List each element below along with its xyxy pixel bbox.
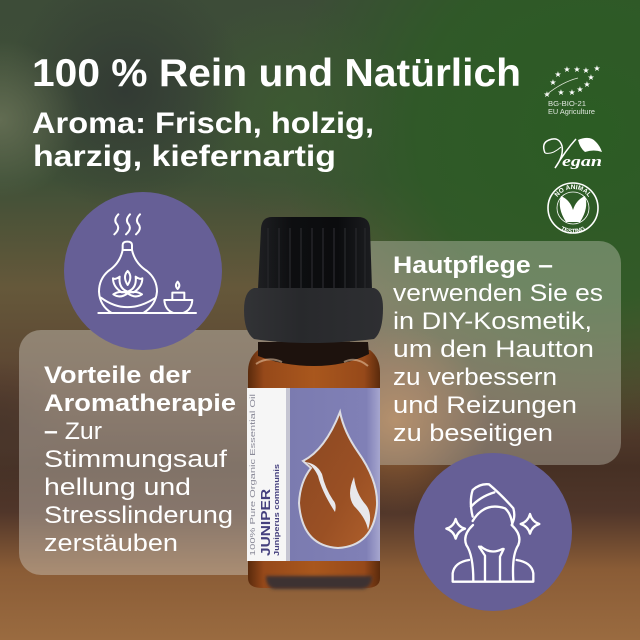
- badge: no animal testing: TESTING: [562, 226, 585, 232]
- badge: EU organic leaf: [543, 64, 601, 116]
- icon: diffuser with lotus and candle: [98, 214, 196, 313]
- badge: EU organic leaf: ★: [587, 73, 595, 82]
- panel: skin care background: [350, 241, 621, 465]
- text block: skin care: zu beseitigen: [393, 420, 553, 447]
- text block: aromatherapy benefits: hellung und: [44, 474, 191, 501]
- badge: EU organic leaf: ★: [576, 85, 584, 94]
- badge: vegan: egan: [562, 154, 602, 170]
- text block: aromatherapy benefits: [44, 362, 236, 557]
- badge: EU organic leaf: ★: [557, 88, 565, 97]
- badge: EU organic leaf: ★: [573, 65, 581, 74]
- text block: skin care: verwenden Sie es: [393, 280, 603, 307]
- label: product text: JUNIPER: [258, 488, 273, 556]
- text block: skin care: Hautpflege –: [393, 252, 553, 279]
- text block: skin care: in DIY-Kosmetik,: [393, 308, 592, 335]
- label: purple area: [290, 388, 380, 561]
- label: product text: 100% Pure Organic Essential Oil: [248, 394, 257, 556]
- panel: aromatherapy background: [19, 330, 279, 575]
- badge: EU organic leaf: ★: [563, 65, 571, 74]
- label: product text: [248, 394, 281, 556]
- bottle: [244, 217, 383, 589]
- circle: aromatherapy icon: [64, 192, 222, 350]
- label: oil drop: [299, 412, 377, 548]
- badge: EU organic leaf: BG-BIO-21: [548, 99, 586, 108]
- text block: skin care: um den Hautton: [393, 336, 594, 363]
- badge: EU organic leaf: ★: [554, 70, 562, 79]
- text block: aromatherapy benefits: zerstäuben: [44, 530, 178, 557]
- bottle: dark base shadow: [266, 576, 372, 589]
- badge: no animal testing: NO ANIMAL: [554, 184, 590, 197]
- title: 100 % Rein und Natürlich: [32, 52, 521, 95]
- badge: vegan: [544, 138, 602, 170]
- text block: aromatherapy benefits: Vorteile der: [44, 362, 191, 389]
- icon: woman with towel and sparkles: [446, 484, 539, 582]
- subtitle: aroma: [32, 107, 374, 173]
- label: product text: Juniperus communis: [272, 464, 281, 556]
- text block: skin care: und Reizungen: [393, 392, 577, 419]
- bottle: neck: [258, 342, 369, 366]
- text block: aromatherapy benefits: Aromatherapie: [44, 390, 236, 417]
- bottle: glass highlights: [256, 359, 368, 366]
- badge: EU organic leaf: ★: [593, 64, 601, 73]
- bottle: ribbed cap: [258, 217, 372, 289]
- badge: EU organic leaf: ★: [582, 66, 590, 75]
- badge: EU organic leaf: ★: [543, 90, 551, 99]
- badge: EU organic leaf: ★: [549, 78, 557, 87]
- text block: aromatherapy benefits: Stresslinderung: [44, 502, 233, 529]
- badge: no animal testing: [547, 182, 599, 234]
- label: white strip: [247, 388, 290, 561]
- text block: skin care: zu verbessern: [393, 364, 557, 391]
- badge: EU organic leaf: EU Agriculture: [548, 107, 595, 116]
- text block: skin care: [393, 252, 603, 447]
- subtitle: aroma: Aroma: Frisch, holzig,: [32, 107, 374, 140]
- badge: EU organic leaf: ★: [583, 80, 591, 89]
- badge: EU organic leaf: ★: [568, 88, 576, 97]
- subtitle: aroma: harzig, kiefernartig: [33, 140, 336, 173]
- bottle: collar: [244, 288, 383, 343]
- text block: aromatherapy benefits: – Zur: [44, 418, 102, 445]
- bottle: amber glass body: [248, 350, 380, 588]
- circle: skin care icon: [414, 453, 572, 611]
- text block: aromatherapy benefits: Stimmungsauf: [44, 446, 227, 473]
